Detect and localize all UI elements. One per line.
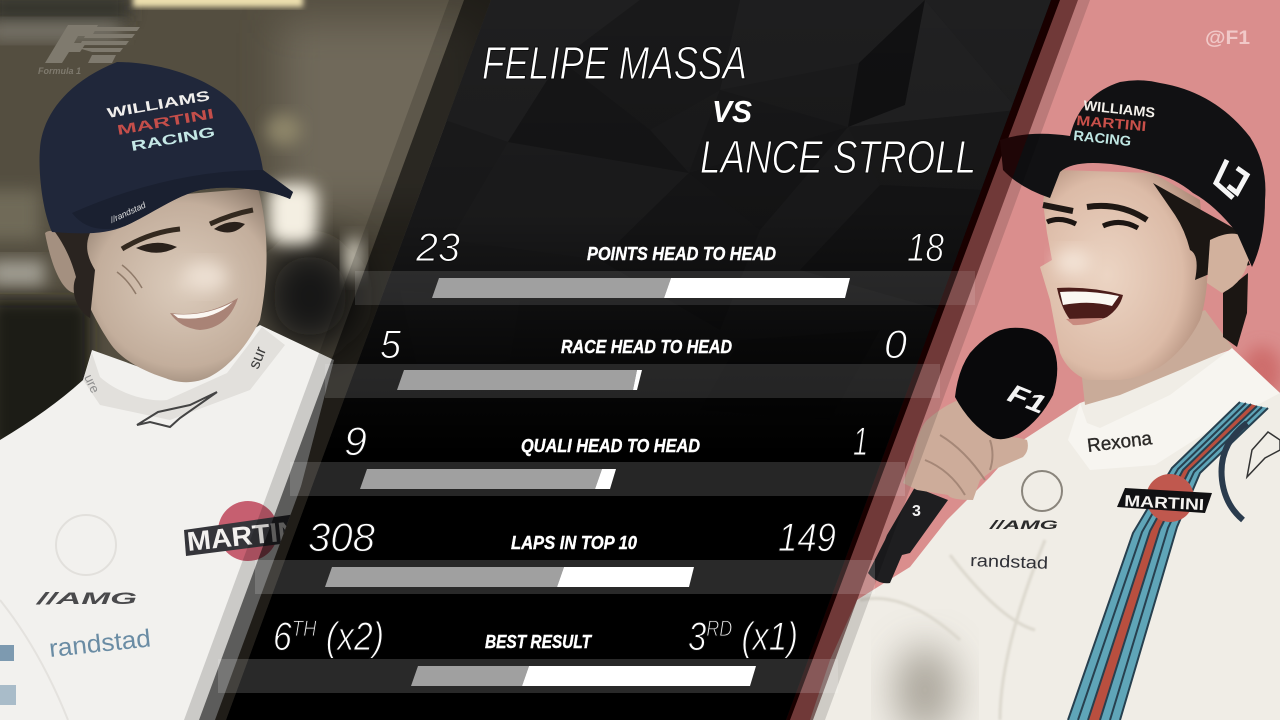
cap: RACING [130,123,216,154]
row: laps in top 10: LAPS IN TOP 10 [511,533,637,553]
suit logos [56,515,116,575]
fingers [925,435,992,495]
cap: RACING [1073,127,1132,149]
eyes [136,222,245,253]
row: points head to head: 18 [907,226,945,270]
photo: Felipe Massa: sur [246,344,270,371]
photo: Lance Stroll: //AMG [988,518,1058,532]
photo: Lance Stroll [810,80,1280,720]
panel: right photo background [790,0,1280,720]
ear [45,230,76,293]
row: race head to head: 5 [380,323,402,367]
ear [1207,234,1250,293]
nose shade [183,262,227,292]
panel: dark low-poly centre [200,0,1100,720]
brows [1043,205,1147,220]
collar logos [137,392,217,427]
cap: //randstad [108,200,147,225]
photo: Lance Stroll: MARTINI [1124,493,1205,514]
hand [903,397,1028,500]
row: best result [218,615,838,693]
row: points head to head: 23 [415,226,460,270]
panel: left photo background [0,0,500,720]
hair [1153,183,1250,280]
row: quali head to head [290,420,905,496]
photo: Felipe Massa: //AMG [35,589,137,608]
hair [55,232,95,318]
row: points head to head [355,226,975,305]
stripes [1068,402,1268,720]
logo: Formula 1: Formula 1 [38,66,81,76]
suit [0,325,334,720]
eyes [1047,219,1138,228]
logo: Formula 1 [38,25,140,76]
row: quali head to head: 9 [344,420,367,464]
overlay: panel fade to black [226,0,1051,720]
photo: Felipe Massa: MARTINI [185,515,308,557]
row: best result: (x1) [732,615,798,659]
alpinestars logo [1247,432,1280,477]
row: quali head to head: 1 [853,420,868,464]
row: best result: 3 [688,615,710,659]
title: VS: VS [712,94,752,129]
row: race head to head [325,323,940,398]
photo: Felipe Massa: ure [81,372,103,395]
title: Felipe Massa: FELIPE MASSA [482,37,747,89]
photo: Felipe Massa [0,62,334,720]
cap: WILLIAMS [106,87,211,121]
cap [40,62,293,233]
label: @F1: @F1 [1205,28,1250,49]
row: quali head to head: QUALI HEAD TO HEAD [521,436,700,456]
row: laps in top 10 [255,516,875,594]
cap: MARTINI [116,105,215,138]
row: best result: 6 [273,615,295,659]
face [1040,170,1207,380]
row: race head to head: 0 [884,323,907,367]
suit [810,350,1280,720]
microphone handle [868,487,948,583]
nose [1055,249,1091,275]
row: points head to head: POINTS HEAD TO HEAD [587,244,776,264]
suit folds [860,540,1045,720]
row: best result: TH [292,616,317,641]
microphone logo: F1 [1004,378,1050,420]
row: laps in top 10: 308 [308,516,376,560]
collar shading [83,327,285,420]
microphone head [955,328,1057,439]
mouth [1057,288,1123,323]
photo: Felipe Massa: randstad [48,624,152,663]
row: best result: (x2) [317,615,384,659]
cap: WILLIAMS [1083,97,1156,121]
band: translucent panel edges [184,0,1090,720]
row: best result: BEST RESULT [485,632,593,652]
row: laps in top 10: 149 [778,516,836,560]
row: race head to head: RACE HEAD TO HEAD [561,337,732,357]
neck [1080,310,1233,405]
row: best result: RD [706,616,732,641]
cap: MARTINI [1076,112,1147,134]
cap [1000,80,1265,267]
face [87,189,267,382]
collar [1068,348,1280,470]
suit logos: Rexona [1086,428,1154,457]
mic number: 3 [912,503,921,520]
sleeve trim [1222,423,1247,520]
eyebrows [122,210,253,249]
cheek lines [117,265,142,294]
title: Lance Stroll: LANCE STROLL [700,131,976,183]
suit shadow [895,645,955,720]
photo: Lance Stroll: randstad [970,551,1048,573]
back hair [1223,273,1248,347]
mouth [170,298,238,330]
